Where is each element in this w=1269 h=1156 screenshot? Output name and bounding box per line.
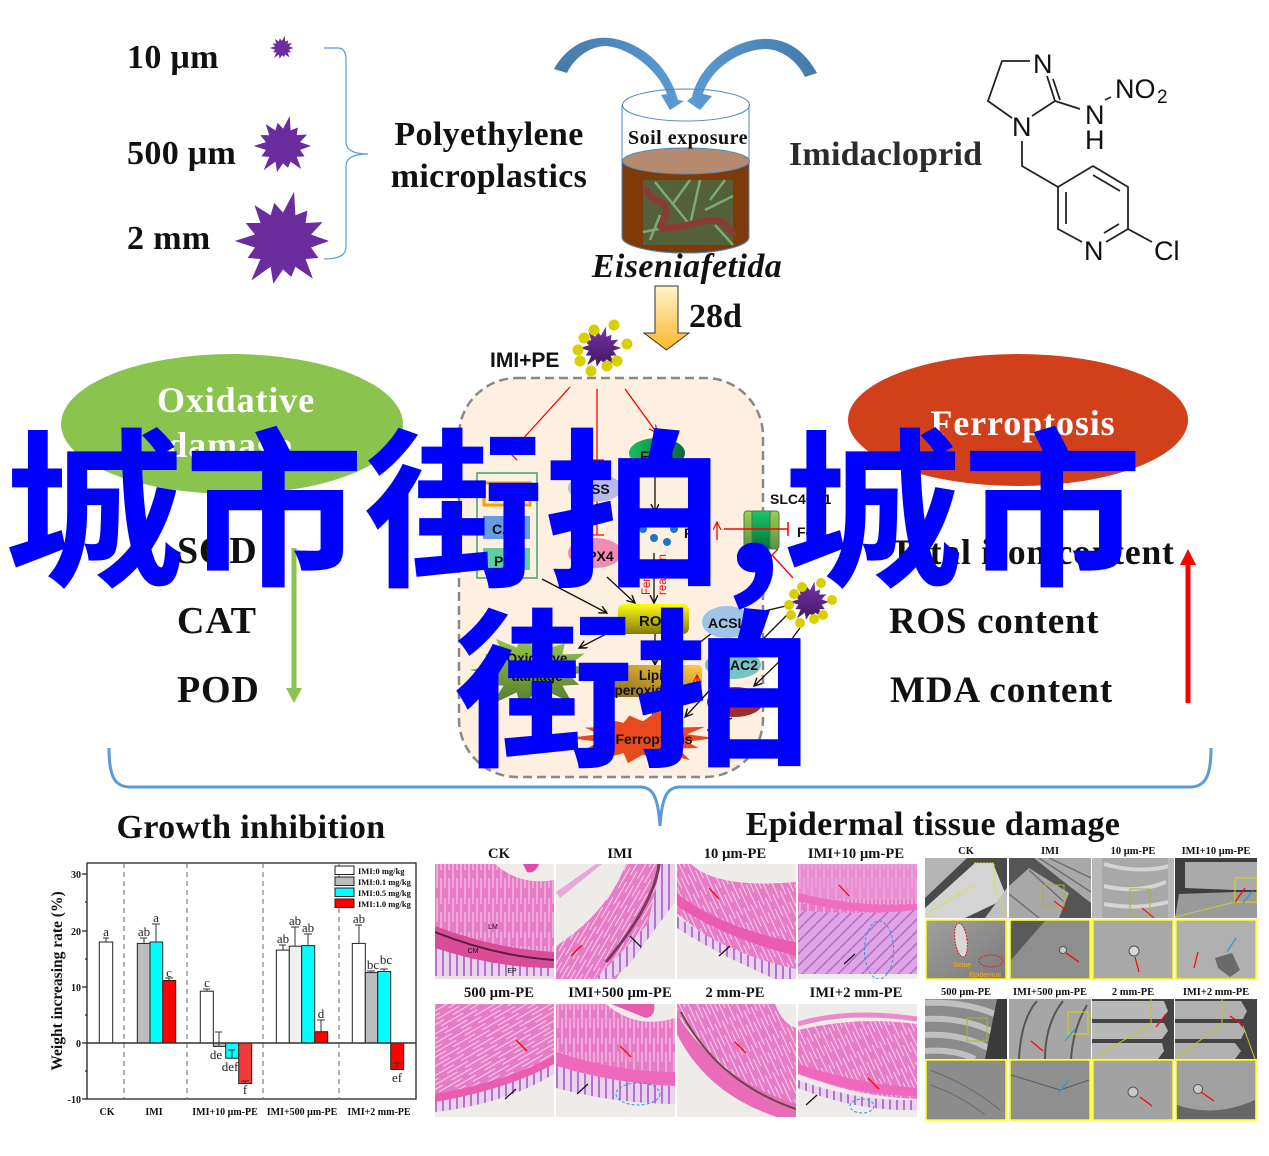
enzyme: SAC2 [705,651,761,679]
label: oxidative damage: damage [167,425,293,465]
icon: 10 um particle [270,36,294,59]
species name: Eiseniafetida [591,248,782,285]
panel: cell pathway [459,320,837,777]
arrow head: decrease [286,688,302,703]
micrograph titles row 1: IMI+10 μm-PE [808,846,904,862]
arrow head: increase [1180,549,1196,565]
photo: earthworm [643,180,733,245]
x axis labels: IMI+2 mm-PE [347,1107,411,1118]
burst: ferroptosis: Ferroptosis [615,731,693,747]
list: ferroptosis markers [889,532,1175,711]
icon: 2 mm particle [235,192,329,284]
channel: SLC40A1 [744,511,779,549]
y axis tick labels: 30 [71,870,81,881]
box: ROS: ROS [639,613,672,630]
rotated label: reaction: reaction [657,554,669,595]
micrograph titles row 1: CK [488,846,511,862]
SEM: 2 mm zoom [1093,1060,1173,1120]
label: 28d: 28d [689,298,742,335]
label: IMI+PE: IMI+PE [490,349,559,372]
significance letters: bc [367,957,379,972]
SEM: 10 um overview [1092,858,1174,918]
chemical structure: imidacloprid: N [1033,49,1052,79]
significance letters: ef [392,1070,403,1085]
micrograph titles row 2: 2 mm-PE [705,985,765,1001]
significance letters [103,910,403,1097]
box: lipid peroxidation [612,665,702,698]
y axis tick labels: -10 [68,1095,81,1106]
enzyme: GPX4 [568,538,622,568]
significance letters: de [210,1047,222,1062]
icon: PE-IMI particle right [784,578,837,628]
heading: polyethylene microplastics: Polyethylene [394,116,584,153]
enzyme: FTH1 [629,438,685,468]
list: ferroptosis markers: Total iron content [890,532,1175,572]
panel: oxidative damage [61,354,403,711]
enzyme: GSS [568,474,622,502]
x axis labels: CK [100,1107,115,1118]
cell body [459,378,763,777]
legend: IMI:0.1 mg/kg [358,877,412,887]
SEM: CK overview [925,858,1007,918]
SEM: IMI zoom [1010,920,1090,979]
icon: 500 um particle [254,116,311,172]
chemical structure: imidacloprid: Cl [1154,236,1180,266]
arrow: from polyethylene [554,38,684,110]
burst: ferroptosis [567,709,715,763]
significance letters: a [153,910,159,925]
x axis labels: IMI [145,1107,163,1118]
y axis tick labels: 20 [71,927,81,938]
arrow: increase [1186,562,1190,703]
micrograph: 10 um-PE [677,864,796,979]
label: ferroptosis: Ferroptosis [930,403,1116,443]
SEM titles row 2 [941,987,1249,998]
micrograph titles row 2 [464,985,902,1001]
micrograph titles row 1 [488,846,904,862]
panel: microplastic sizes [127,36,368,284]
y axis title: Weight increasing rate (%) [49,891,66,1071]
ellipse: oxidative damage [61,354,403,494]
chemical structure: imidacloprid: NO [1115,74,1156,104]
inhibition lines [505,387,793,578]
inhibition: channel [724,522,788,536]
micrograph: IMI+10 um-PE [798,864,917,979]
y axis ticks [82,874,87,1099]
SEM: IMI+2 zoom [1176,1060,1256,1120]
enzyme: GSS: GSS [580,481,610,497]
group separators [124,863,339,1099]
chemical structure: imidacloprid [988,49,1180,266]
micrograph: CK: LM [488,924,498,931]
chemical structure: imidacloprid: 2 [1157,87,1168,108]
error bars [103,924,401,1083]
arrow: from imidacloprid [687,39,817,110]
bar chart: weight increasing rate [49,863,416,1118]
chemical structure: imidacloprid: N [1085,100,1104,130]
list: ferroptosis markers: MDA content [890,670,1113,711]
bracket [324,48,368,259]
significance letters: bc [380,952,392,967]
micrograph titles row 1: IMI [607,846,633,862]
label: 2 mm: 2 mm [127,220,211,257]
overlay title: blue watermark text: 城市街拍,城市 [4,374,1142,623]
micrograph: IMI [556,864,675,979]
SEM titles row 2: 2 mm-PE [1112,987,1154,998]
significance letters: ab [353,911,365,926]
SEM: IMI+500 zoom [1010,1060,1090,1120]
label: 500 um: 500 μm [127,135,236,172]
black pathway arrows [542,477,800,730]
bracket: bottom summary [109,748,1211,826]
rotated label: Fenton reaction: Fenton [641,559,653,595]
list: ferroptosis markers: ROS content [889,601,1099,642]
significance letters: f [243,1082,248,1097]
chemical structure: imidacloprid: H [1085,125,1104,155]
SEM: IMI+10 overview [1175,858,1257,918]
arrow: decrease [292,548,296,695]
burst: oxidative damage: damage [511,669,563,684]
panel: SEM micrographs [925,846,1257,1120]
heading: epidermal tissue damage: Epidermal tissue damage [746,806,1120,843]
chemical structure: imidacloprid: N [1084,236,1104,266]
SEM titles row 2: IMI+500 μm-PE [1013,987,1087,998]
box: lipid peroxidation: Lipid [639,668,671,683]
y axis tick labels: 0 [76,1039,81,1050]
list: antioxidant enzymes: CAT [177,600,257,642]
panel: HE micrographs [435,846,917,1117]
label: SLC40A1: SLC40A1 [770,491,832,507]
enzyme: red [707,687,763,717]
label: 10 um: 10 μm [127,39,219,76]
y axis tick labels [68,870,81,1106]
red up arrow: lipid [696,675,698,690]
micrograph: 2 mm-PE [677,1004,796,1117]
micrograph: IMI+500 um-PE [556,1004,675,1117]
SEM: IMI+2 overview [1175,999,1257,1059]
micrograph titles row 2: 500 μm-PE [464,985,534,1001]
legend [335,866,412,909]
micrograph titles row 2: IMI+500 μm-PE [568,985,672,1001]
soil cylinder [622,89,750,253]
SEM: IMI+10 zoom [1176,920,1256,979]
enzyme: ACSL4: ACSL4 [708,615,754,631]
significance letters: a [103,924,109,939]
heading: growth inhibition: Growth inhibition [117,809,385,846]
SEM titles row 1 [958,846,1250,857]
micrograph titles row 1: 10 μm-PE [704,846,766,862]
SEM: 10 um zoom [1093,920,1173,979]
list: antioxidant enzymes: SOD [177,530,258,572]
significance letters: ab [289,913,301,928]
label: Fe: Fe [684,525,701,541]
significance letters: ab [138,924,150,939]
SEM titles row 1: IMI [1041,846,1059,857]
panel: ferroptosis [848,354,1196,711]
enzyme box: antioxidant group: POD [494,553,524,569]
SEM: CK zoom [926,920,1006,979]
SEM titles row 2: IMI+2 mm-PE [1183,987,1249,998]
significance letters: c [204,975,210,990]
enzyme: FTH1: FTH1 [640,448,675,464]
chemical structure: imidacloprid: N [1012,112,1032,142]
SEM: 2 mm overview [1092,999,1174,1059]
iron dots [639,525,678,546]
x axis labels: IMI+500 μm-PE [267,1107,338,1118]
plot frame [87,863,416,1099]
SEM titles row 2: 500 μm-PE [941,987,991,998]
panel: soil exposure [554,38,817,350]
micrograph: CK [435,864,554,979]
legend: IMI:1.0 mg/kg [358,899,412,909]
x axis labels [100,1107,411,1118]
burst: oxidative damage [470,627,593,707]
overlay title: blue watermark text [4,374,1142,803]
box: ROS [618,604,689,634]
significance letters: ab [302,920,314,935]
significance letters: c [166,965,172,980]
red up arrow: Fe [716,522,718,540]
micrograph: CK: CM [468,948,479,955]
bars [99,942,404,1084]
arrow: 28d [644,286,689,350]
box: lipid peroxidation: peroxidation [614,683,696,698]
SEM titles row 1: IMI+10 μm-PE [1182,846,1250,857]
SEM: CK zoom: Epidermal [969,972,1001,979]
enzyme box: antioxidant group: CAT [492,521,520,537]
SEM: 500 um overview [925,999,1007,1059]
overlay title: blue watermark text: 街拍 [454,554,814,803]
ellipse: ferroptosis [848,354,1188,486]
SEM titles row 1: CK [958,846,975,857]
x axis labels: IMI+10 μm-PE [192,1107,258,1118]
icon: PE-IMI particle top [572,320,632,376]
SEM: IMI overview [1009,858,1091,918]
zero line [87,1042,416,1044]
legend: IMI:0.5 mg/kg [358,888,412,898]
legend: IMI:0 mg/kg [358,866,405,876]
significance letters: def [222,1059,239,1074]
list: antioxidant enzymes: POD [177,669,260,711]
micrograph: IMI+2 mm-PE [798,1004,917,1117]
micrograph: CK: EP [507,968,517,975]
SEM: IMI+500 overview [1009,999,1091,1059]
micrograph: 500 um-PE [435,1004,554,1117]
label: oxidative damage: Oxidative [157,380,315,420]
SEM: 500 um zoom [926,1060,1006,1120]
enzyme: GPX4: GPX4 [576,548,614,564]
burst: oxidative damage: Oxidative [507,651,568,666]
SEM titles row 1: 10 μm-PE [1111,846,1155,857]
enzyme: ACSL4 [702,606,754,638]
label: Fe outside: Fe [797,524,814,540]
y axis tick labels: 10 [71,983,81,994]
significance letters: ab [277,931,289,946]
enzyme box: antioxidant group [477,473,537,578]
heading: polyethylene microplastics: microplastics [391,158,587,195]
significance letters: d [318,1006,325,1021]
micrograph titles row 2: IMI+2 mm-PE [810,985,902,1001]
label: soil exposure: Soil exposure [628,127,748,149]
heading: imidacloprid: Imidacloprid [789,136,982,173]
enzyme: SAC2: AC2 [730,657,758,673]
SEM: CK zoom: Setae [953,962,971,969]
